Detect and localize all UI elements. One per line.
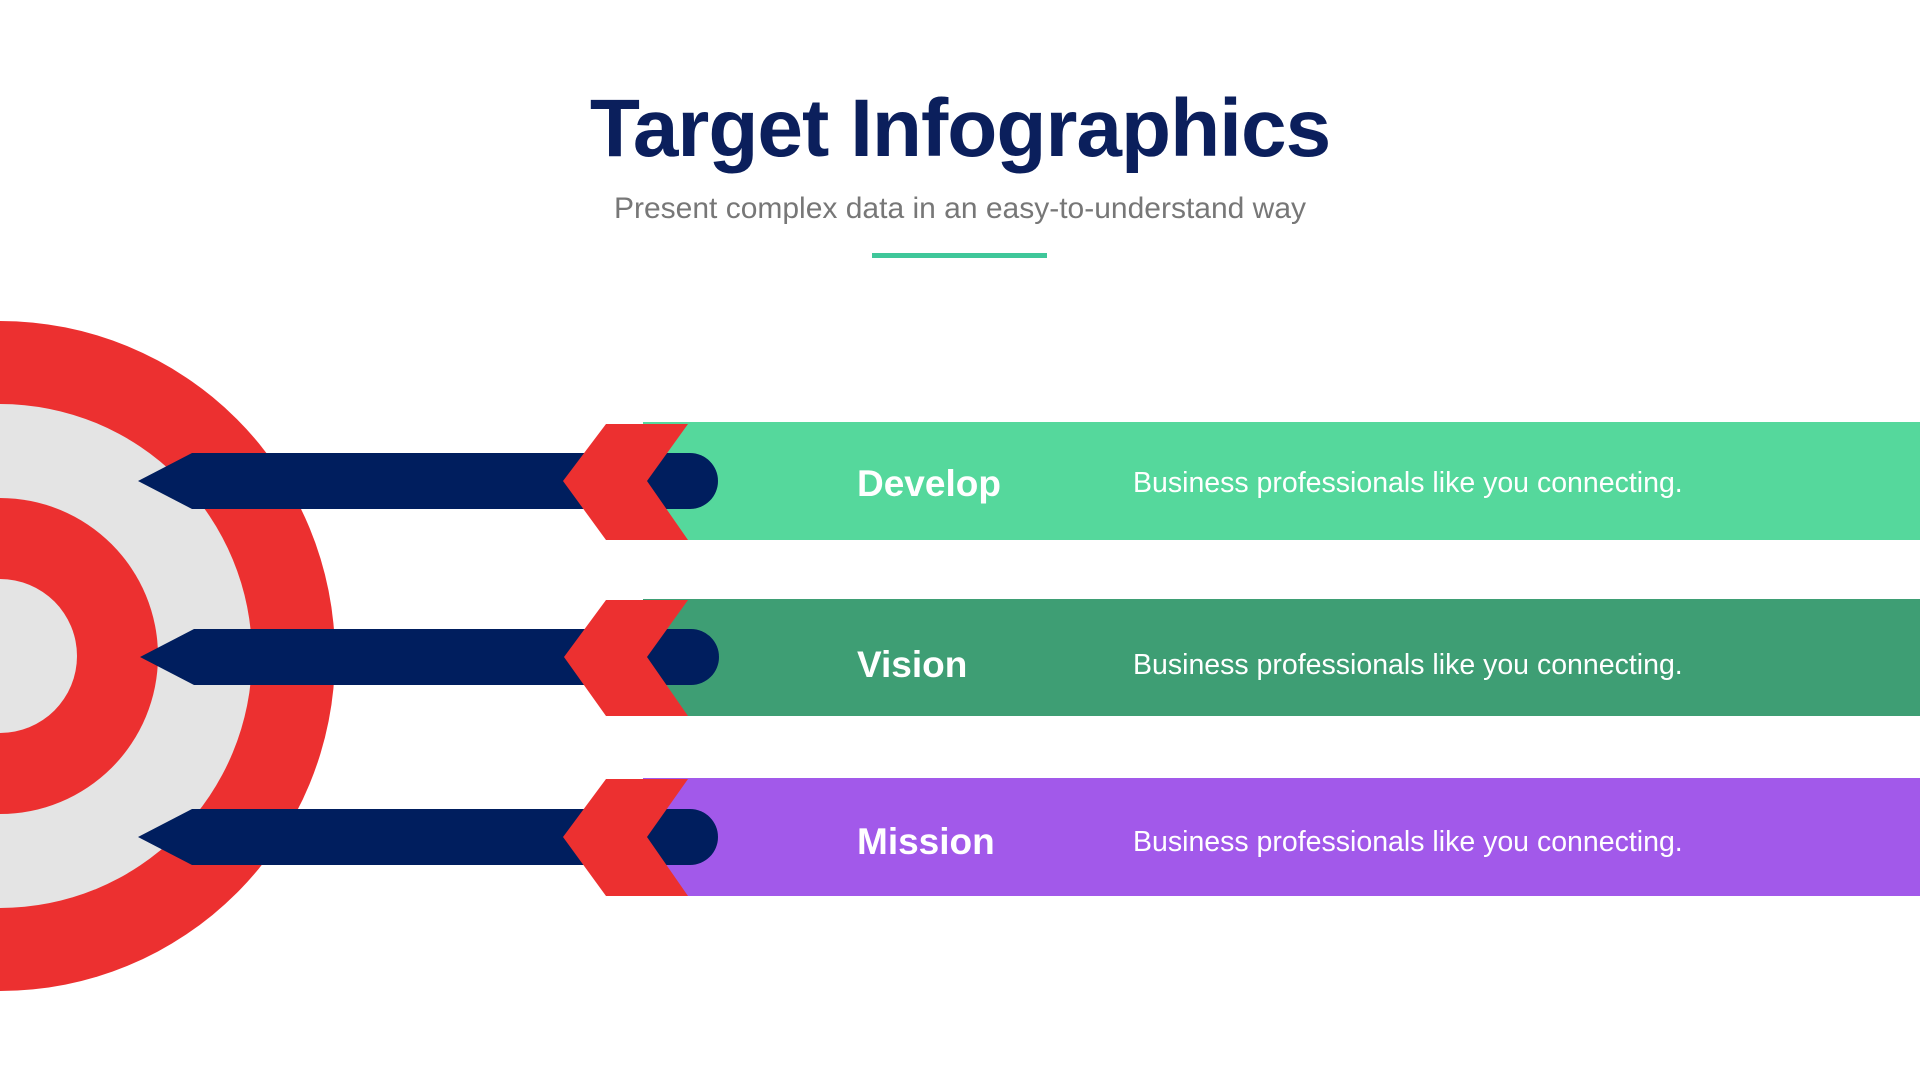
band: develop: Develop xyxy=(857,463,1001,504)
arrow 2 xyxy=(140,600,719,716)
band: develop: Business professionals like you connecting. xyxy=(1133,467,1683,499)
band: mission xyxy=(643,778,1920,896)
band: vision xyxy=(643,599,1920,716)
band: vision: Business professionals like you connecting. xyxy=(1133,649,1683,681)
band: develop xyxy=(643,422,1920,540)
accent line xyxy=(872,253,1047,258)
title: Target Infographics xyxy=(590,83,1330,174)
band: mission: Mission xyxy=(857,821,995,862)
target xyxy=(0,321,335,991)
band: mission: Business professionals like you connecting. xyxy=(1133,826,1683,858)
subtitle: Present complex data in an easy-to-understand way xyxy=(614,192,1306,225)
arrow 3 xyxy=(138,779,718,896)
band: vision: Vision xyxy=(857,644,967,685)
arrow 1 xyxy=(138,424,718,540)
